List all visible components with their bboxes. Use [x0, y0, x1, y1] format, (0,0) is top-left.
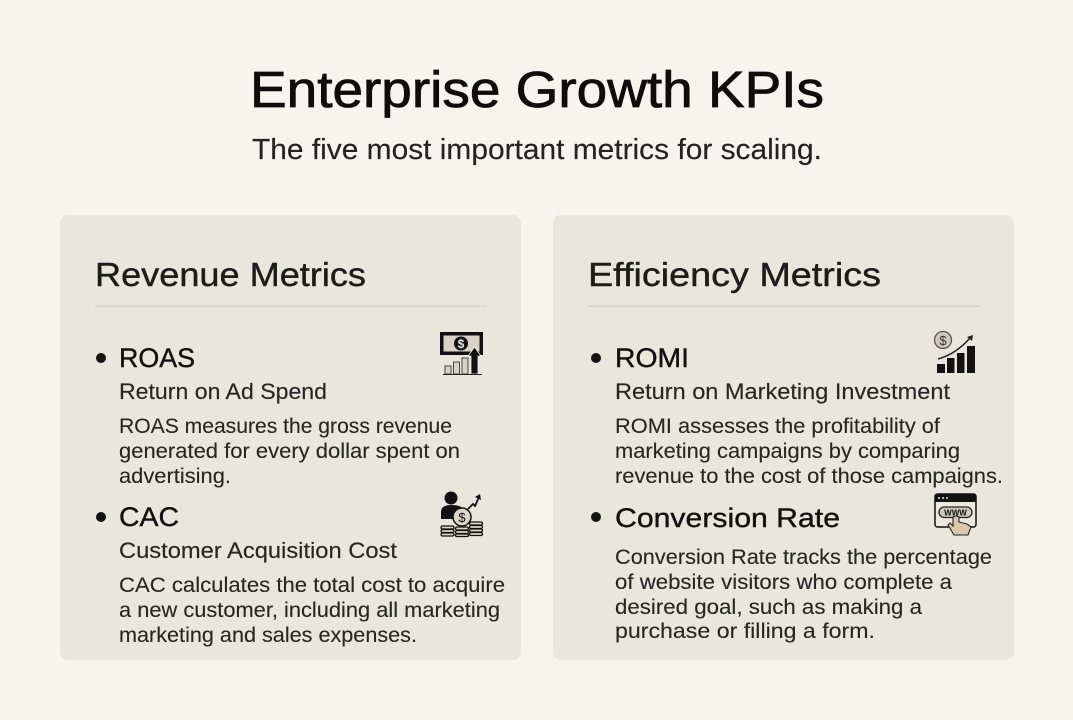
metric: ROAS — [96, 343, 460, 488]
title: Enterprise Growth KPIs — [250, 61, 824, 118]
metric: conversion rate: Conversion Rate — [615, 503, 840, 533]
metric: conversion rate — [591, 503, 992, 643]
subtitle: The five most important metrics for scaling. — [252, 134, 822, 166]
panel: revenue metrics — [60, 215, 521, 660]
metric: conversion rate: desired goal, such as making a — [615, 596, 922, 619]
metric: ROAS: ROAS measures the gross revenue — [119, 415, 452, 438]
icon: coin and growth bars — [934, 332, 975, 373]
metric: CAC: CAC — [119, 502, 179, 532]
metric: ROAS: Return on Ad Spend — [119, 379, 327, 404]
metric: ROMI: marketing campaigns by comparing — [615, 440, 960, 463]
metric: ROAS: generated for every dollar spent on — [119, 440, 460, 463]
icon: banknote with rising bars — [440, 332, 483, 375]
metric: CAC: CAC calculates the total cost to acquire — [119, 574, 505, 597]
metric: conversion rate: purchase or filling a form. — [615, 620, 875, 643]
metric: CAC: Customer Acquisition Cost — [119, 538, 397, 563]
metric: ROMI: Return on Marketing Investment — [615, 379, 950, 404]
heading: efficiency metrics: Efficiency Metrics — [588, 256, 881, 293]
metric: ROMI: ROMI assesses the profitability of — [615, 415, 940, 438]
metric: conversion rate: Conversion Rate tracks the percentage — [615, 546, 992, 569]
metric: ROMI: ROMI — [615, 343, 689, 373]
metric: conversion rate: of website visitors who complete a — [615, 571, 952, 594]
icon: banknote with rising bars: $ — [458, 337, 465, 351]
icon: customer with coins: $ — [458, 510, 466, 525]
heading: revenue metrics: Revenue Metrics — [95, 256, 366, 293]
metric: ROAS: advertising. — [119, 465, 231, 488]
metric: ROAS: ROAS — [119, 343, 195, 373]
metric: ROMI: revenue to the cost of those campaigns. — [615, 465, 1003, 488]
panel: efficiency metrics — [553, 215, 1014, 660]
icon: coin and growth bars: $ — [939, 333, 947, 348]
icon: browser window with click — [935, 494, 976, 535]
icon: customer with coins — [441, 492, 482, 536]
icon: browser window with click: WWW — [944, 508, 967, 518]
metric: ROMI — [591, 343, 1003, 488]
metric: CAC — [96, 502, 505, 647]
metric: CAC: marketing and sales expenses. — [119, 624, 417, 647]
metric: CAC: a new customer, including all marketing — [119, 599, 500, 622]
